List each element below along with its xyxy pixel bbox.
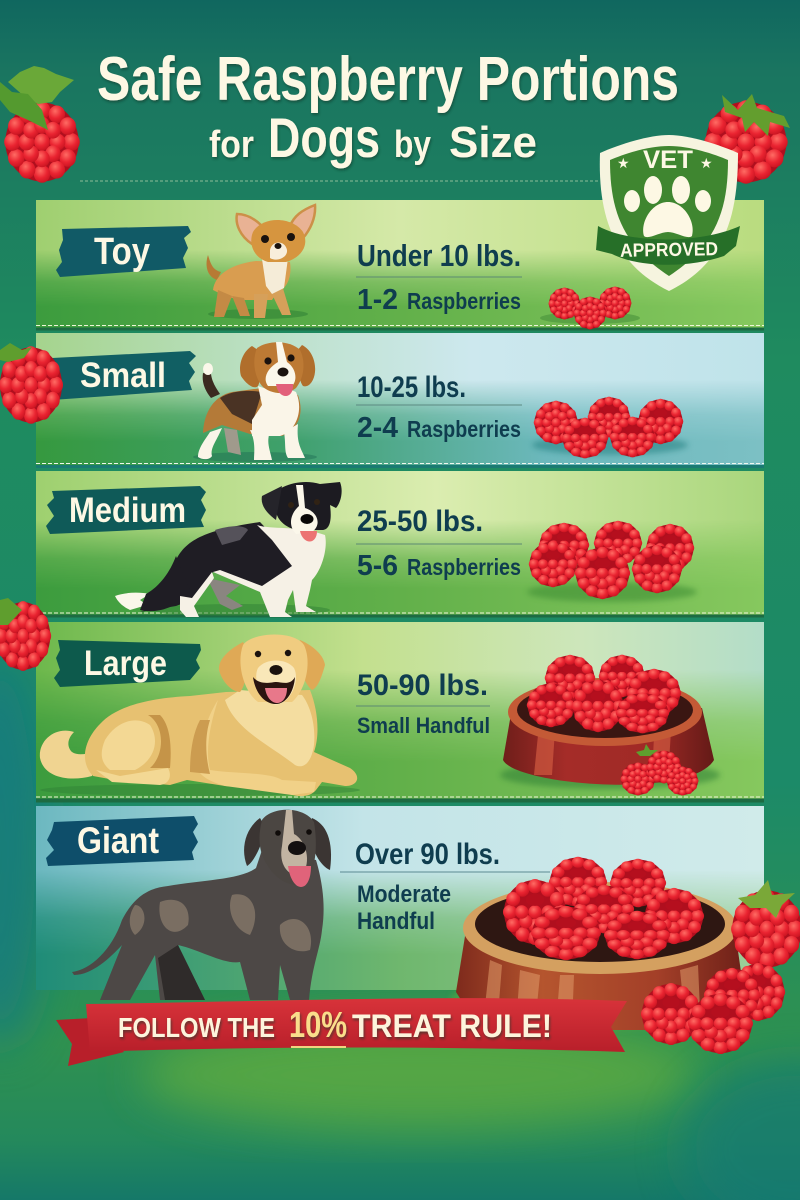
dog: great dane <box>72 810 331 1000</box>
dog: chihuahua <box>207 205 315 319</box>
badge: vet approved: VET <box>643 146 693 174</box>
badge: vet approved: ★ <box>617 155 630 171</box>
title: for <box>209 124 254 166</box>
title: Safe Raspberry Portions <box>97 45 679 114</box>
ribbon label: APPROVED <box>620 239 718 262</box>
ribbon: follow the 10% treat rule <box>56 998 627 1066</box>
raspberry: left edge 2 <box>0 598 51 671</box>
panel: medium <box>36 471 764 617</box>
title <box>97 45 679 169</box>
portion: toy: 1-2 <box>357 284 398 316</box>
size label: medium <box>46 486 206 534</box>
size label: small: Small <box>80 356 166 395</box>
size label: medium: Medium <box>69 491 186 530</box>
ribbon label <box>596 226 740 265</box>
size label: giant <box>46 816 198 866</box>
raspberry: top right <box>704 94 790 184</box>
raspberries: toy <box>540 287 640 329</box>
ribbon: follow the 10% treat rule: 10% <box>289 1004 347 1045</box>
portion: toy: Raspberries <box>407 288 521 314</box>
portion: large: Small Handful <box>357 713 490 738</box>
dog: beagle <box>193 342 317 462</box>
weight: medium: 25-50 lbs. <box>357 505 483 538</box>
raspberries: lower right pile <box>641 963 785 1054</box>
portion: giant: Moderate <box>357 881 451 908</box>
raspberry: lower right with stem <box>731 880 800 969</box>
weight: small: 10-25 lbs. <box>357 371 466 404</box>
weight: large: 50-90 lbs. <box>357 669 488 702</box>
raspberry: top left with leaves <box>0 66 80 183</box>
dog: golden retriever <box>40 634 360 796</box>
title: Dogs <box>268 106 380 169</box>
raspberries: medium <box>527 521 697 602</box>
size label: large: Large <box>84 644 167 683</box>
bowl: giant <box>450 857 750 1030</box>
portion: medium: Raspberries <box>407 554 521 580</box>
size label: toy: Toy <box>94 231 150 273</box>
paw icon <box>624 176 711 237</box>
panel: small <box>36 333 764 467</box>
ribbon: follow the 10% treat rule: TREAT RULE! <box>352 1008 552 1044</box>
badge: vet approved <box>596 135 740 291</box>
bowl: large <box>500 655 720 796</box>
title: Size <box>449 118 537 167</box>
portion: small: 2-4 <box>357 412 398 444</box>
size label: large <box>54 640 201 687</box>
size label: toy <box>56 226 191 277</box>
weight: toy: Under 10 lbs. <box>357 238 521 273</box>
size label: small <box>52 351 196 400</box>
panel: toy <box>36 200 764 330</box>
badge: vet approved: ★ <box>700 155 713 171</box>
dog: border collie <box>115 482 342 617</box>
size label: giant: Giant <box>77 820 159 861</box>
panel: giant <box>36 806 764 1000</box>
title: by <box>394 124 431 166</box>
weight: giant: Over 90 lbs. <box>355 838 500 871</box>
portion: small: Raspberries <box>407 416 521 442</box>
portion: giant: Handful <box>357 908 435 935</box>
raspberries in bowl <box>503 857 704 960</box>
panel: large <box>36 622 764 800</box>
ribbon: follow the 10% treat rule: FOLLOW THE <box>118 1012 275 1043</box>
raspberry: left edge 1 <box>0 343 63 424</box>
portion: medium: 5-6 <box>357 550 398 582</box>
raspberries: small <box>532 397 688 458</box>
